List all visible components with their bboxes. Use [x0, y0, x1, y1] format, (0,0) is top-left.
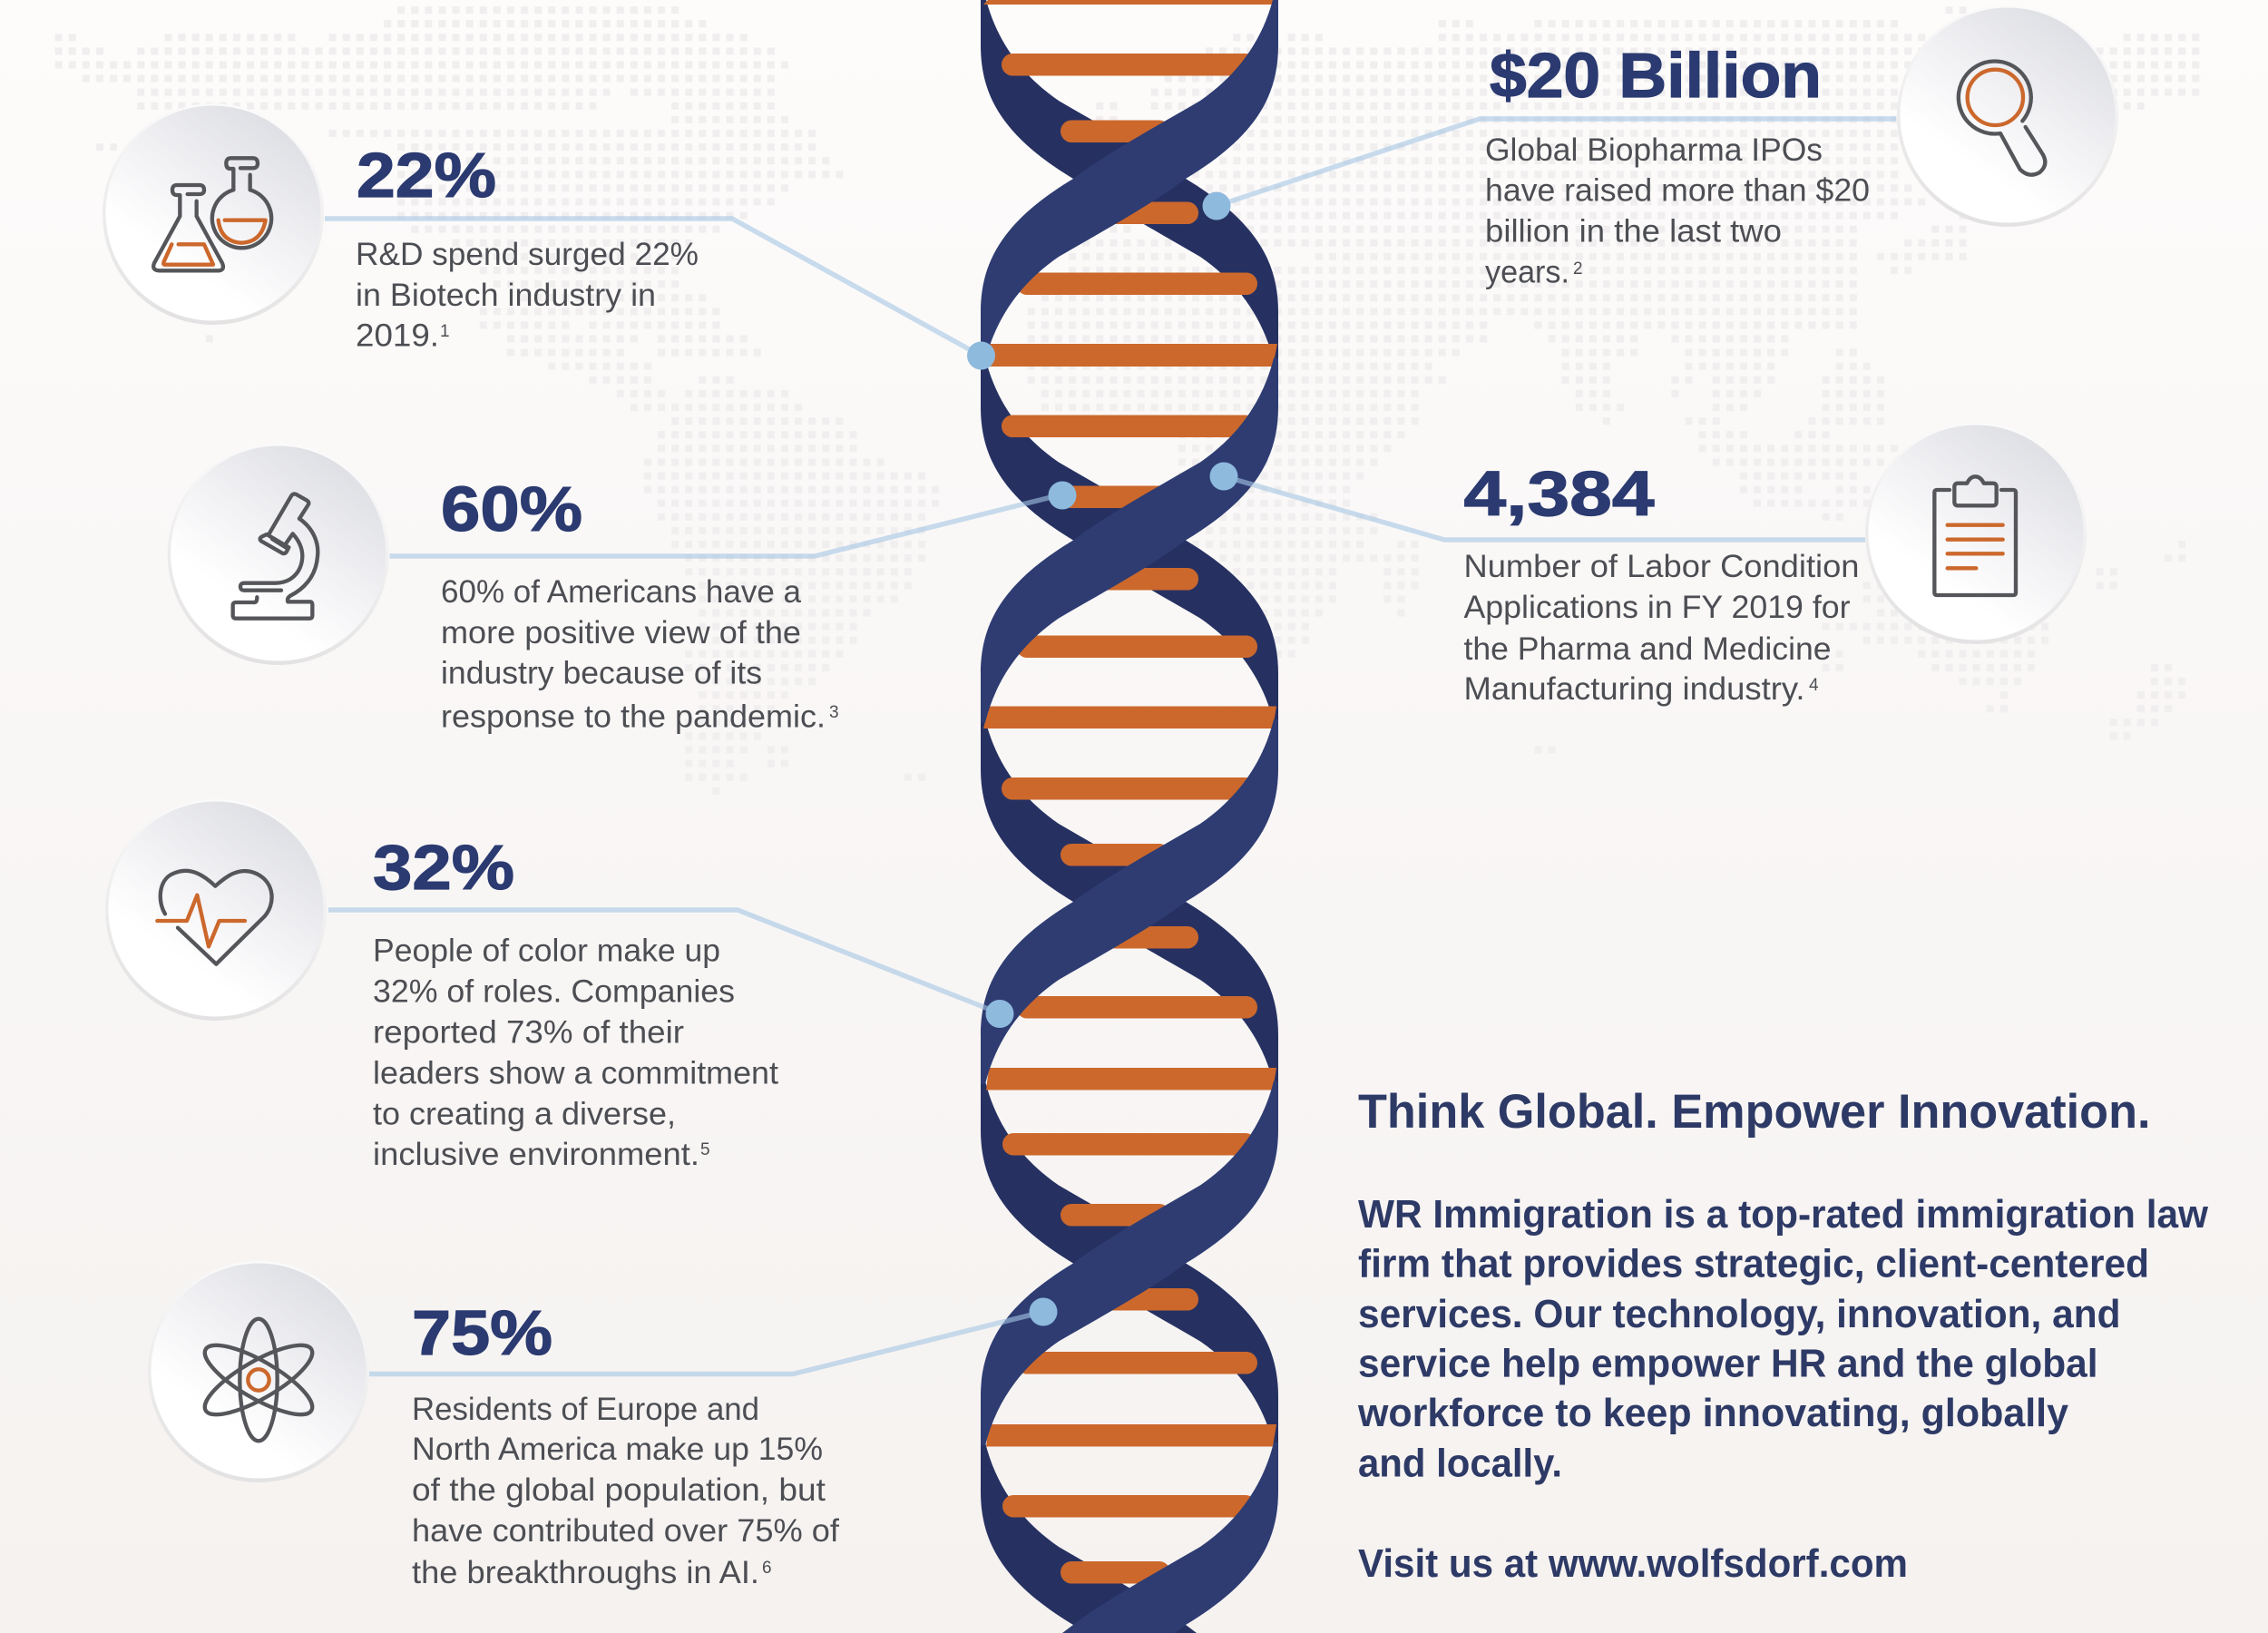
panel: 60% stat: [168, 444, 1076, 735]
description: the Pharma and Medicine: [1464, 631, 1831, 667]
panel: 4,384 stat: [1210, 423, 2087, 707]
orange rungs: [983, 0, 1277, 1584]
connector line: [325, 219, 981, 356]
description: billion in the last two: [1485, 214, 1782, 249]
connector line: [328, 910, 1000, 1013]
description: 3: [829, 703, 839, 722]
stat heading: 32%: [373, 832, 514, 903]
stat heading: $20 Billion: [1490, 40, 1822, 111]
description: Number of Labor Condition: [1464, 549, 1860, 584]
description: Manufacturing industry.: [1464, 671, 1805, 707]
icon: magnifying glass: [1897, 5, 2118, 227]
stat heading: 75%: [412, 1297, 552, 1368]
description: People of color make up: [373, 933, 720, 969]
panel: $20 Billion stat: [1203, 5, 2118, 290]
company description: services. Our technology, innovation, and: [1358, 1292, 2121, 1336]
description: industry because of its: [441, 655, 762, 691]
description: 1: [440, 322, 450, 341]
description: 4: [1809, 676, 1819, 695]
company description: service help empower HR and the global: [1358, 1341, 2097, 1385]
connector line: [1224, 476, 1865, 540]
description: [441, 574, 839, 735]
description: 5: [700, 1140, 710, 1159]
description: [412, 1392, 839, 1590]
connector dot: [985, 1000, 1014, 1028]
connector dot: [1029, 1297, 1058, 1326]
description: Applications in FY 2019 for: [1464, 590, 1851, 625]
website link: Visit us at www.wolfsdorf.com: [1358, 1541, 1908, 1586]
dotted world map: [52, 4, 2203, 797]
connector dot: [1049, 481, 1076, 510]
description: leaders show a commitment: [373, 1056, 778, 1090]
DNA double helix: [981, 0, 1278, 1633]
description: 6: [762, 1559, 772, 1578]
icon: clipboard: [1865, 423, 2087, 644]
company description: [1357, 1192, 2209, 1486]
description: [356, 237, 699, 354]
connector dot: [1210, 463, 1237, 490]
description: in Biotech industry in: [356, 278, 656, 313]
description: [1485, 132, 1870, 290]
description: 32% of roles. Companies: [373, 974, 735, 1009]
panel: 22% stat: [103, 103, 995, 370]
description: have contributed over 75% of: [412, 1513, 839, 1549]
connector dot: [967, 341, 995, 370]
description: have raised more than $20: [1485, 173, 1870, 209]
connector line: [1217, 119, 1896, 206]
panel: 75% stat: [148, 1261, 1058, 1590]
description: years.: [1485, 254, 1569, 290]
description: R&D spend surged 22%: [356, 237, 699, 272]
description: [373, 933, 778, 1172]
icon: microscope: [168, 444, 389, 665]
company description: firm that provides strategic, client-centered: [1358, 1241, 2149, 1286]
description: 60% of Americans have a: [441, 574, 802, 610]
description: [1464, 549, 1860, 707]
description: 2019.: [356, 318, 439, 354]
panel: about WR Immigration: [1357, 1085, 2209, 1586]
description: North America make up 15%: [412, 1432, 823, 1467]
description: of the global population, but: [412, 1472, 826, 1508]
connector dot: [1203, 192, 1230, 220]
back strands: [981, 0, 1278, 1633]
company description: workforce to keep innovating, globally: [1357, 1391, 2069, 1435]
description: Residents of Europe and: [412, 1392, 759, 1427]
stat heading: 60%: [441, 474, 582, 544]
stat heading: 4,384: [1464, 458, 1655, 529]
description: Global Biopharma IPOs: [1485, 132, 1823, 168]
description: the breakthroughs in AI.: [412, 1555, 759, 1590]
panel: 32% stat: [105, 799, 1014, 1172]
connector line: [390, 494, 1062, 556]
company description: WR Immigration is a top-rated immigration law: [1358, 1192, 2209, 1237]
icon: flasks: [103, 103, 324, 325]
front strands: [981, 0, 1278, 1633]
icon: heart with pulse: [105, 799, 327, 1021]
icon: atom: [148, 1261, 369, 1482]
company description: and locally.: [1358, 1442, 1562, 1486]
description: 2: [1573, 259, 1583, 279]
stat heading: 22%: [357, 140, 496, 210]
block heading: Think Global. Empower Innovation.: [1358, 1085, 2150, 1139]
description: to creating a diverse,: [373, 1096, 676, 1132]
description: response to the pandemic.: [441, 699, 826, 735]
connector line: [369, 1312, 1043, 1374]
description: reported 73% of their: [373, 1014, 684, 1051]
description: inclusive environment.: [373, 1137, 699, 1172]
description: more positive view of the: [441, 615, 801, 650]
